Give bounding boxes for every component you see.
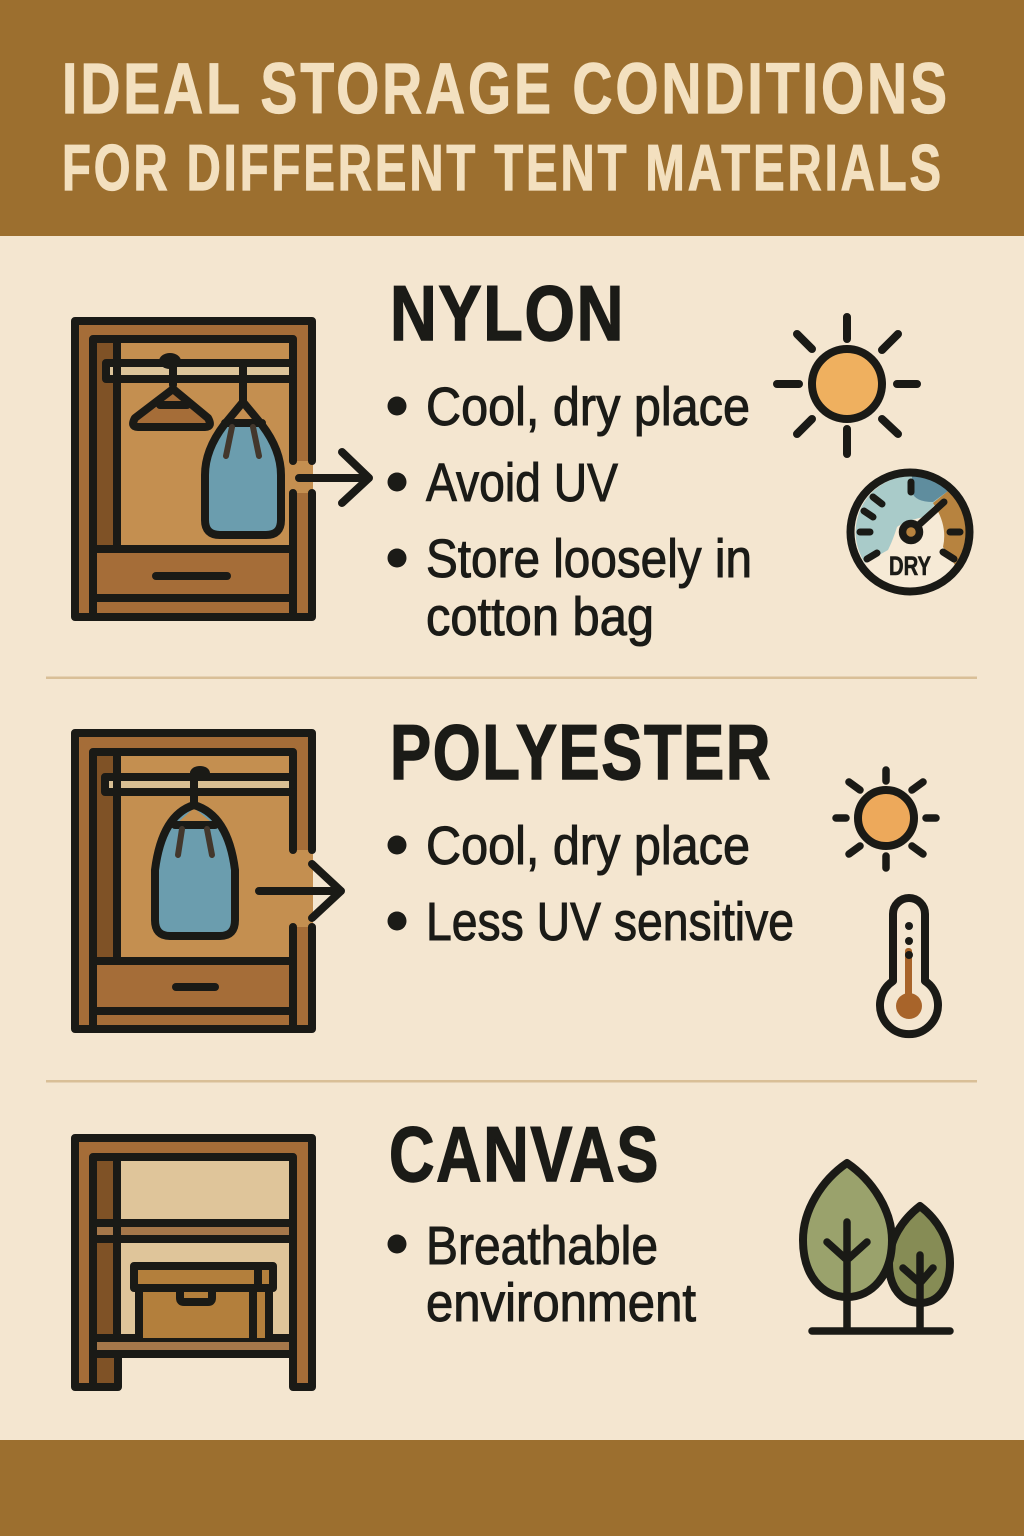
panel: nylon (75, 269, 970, 647)
header banner (0, 0, 1024, 236)
heading: canvas: CANVAS (389, 1110, 660, 1198)
icon: dry gauge (850, 472, 970, 592)
bullet list: nylon: Avoid UV (426, 453, 618, 513)
footer banner (0, 1440, 1024, 1536)
bullet list: canvas (388, 1216, 696, 1333)
icon: wardrobe with hanger and bag (75, 321, 369, 617)
icon: empty hanger (132, 353, 210, 427)
bullet list: canvas: Breathable (426, 1216, 658, 1276)
icon: wardrobe with bag (75, 733, 341, 1029)
arrow (259, 864, 341, 918)
panel: canvas (75, 1110, 950, 1387)
heading: polyester: POLYESTER (390, 708, 772, 796)
icon: open shelf with box (75, 1138, 312, 1387)
icon: thermometer (880, 898, 938, 1034)
icon: sun (777, 317, 917, 454)
bullet list: polyester: Less UV sensitive (426, 892, 794, 952)
gauge label: DRY (889, 551, 931, 581)
icon: small sun (836, 770, 936, 868)
icon: trees (803, 1163, 950, 1331)
panel: polyester (75, 708, 938, 1034)
bullet list: polyester: Cool, dry place (426, 816, 750, 876)
bullet list: polyester (388, 816, 794, 952)
bullet list: canvas: environment (426, 1273, 696, 1333)
icon: blue tent bag (205, 366, 281, 535)
bullet list: nylon: Store loosely in (426, 529, 752, 589)
icon: blue tent bag (155, 773, 235, 936)
heading: nylon: NYLON (390, 269, 625, 357)
bullet list: nylon: cotton bag (426, 587, 654, 647)
bullet list: nylon: Cool, dry place (426, 377, 750, 437)
icon: storage box (134, 1266, 273, 1338)
bullet list: nylon (388, 377, 752, 647)
arrow (299, 452, 369, 503)
